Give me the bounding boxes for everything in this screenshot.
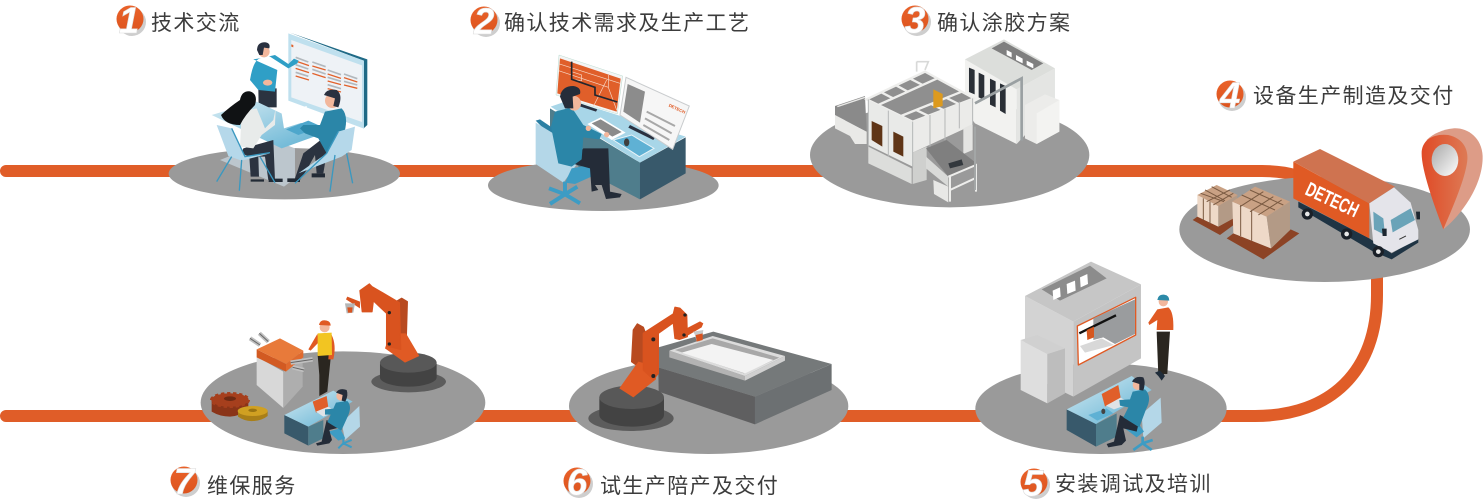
step 5 scene: installation and training: [975, 262, 1227, 454]
platform 1: [169, 148, 400, 199]
badge 2: [470, 1, 500, 42]
heading 1: 技术交流: [151, 12, 241, 35]
truck logo: DETECH: [1302, 179, 1362, 222]
step 4 scene: manufacture and delivery: [1179, 128, 1483, 282]
laptop: [1102, 385, 1131, 409]
side cabinet: [1021, 335, 1065, 403]
heading 3: 确认涂胶方案: [937, 12, 1071, 35]
operator chair: [1123, 398, 1162, 450]
badge 1: 1: [119, 0, 139, 41]
desk: [284, 391, 353, 446]
outfeed conveyor and stand: [926, 127, 977, 202]
delivery truck: [1293, 149, 1420, 259]
wheels: [1302, 208, 1384, 257]
laptop: [313, 396, 336, 417]
badge 6: [564, 462, 593, 503]
left conveyor: [835, 96, 867, 144]
robot base: [371, 353, 446, 392]
step 6 scene: trial production: [569, 307, 848, 454]
coating tray: [669, 336, 785, 381]
step 1 scene: technical exchange: [169, 33, 400, 199]
badge 5: [1020, 463, 1050, 504]
meeting table: [212, 102, 323, 187]
desk: [550, 100, 686, 199]
platform 3: [810, 103, 1089, 207]
heading 6: 试生产陪产及交付: [600, 475, 779, 498]
process line: upper route: [6, 171, 1330, 190]
robot base: [588, 386, 674, 431]
monitor wall: [288, 33, 367, 129]
robot arm: [619, 307, 703, 397]
pallet of boxes: large: [1227, 187, 1299, 259]
platform 4: [1179, 177, 1470, 282]
work platform: [658, 332, 832, 424]
monitor: orange schematic: [556, 55, 623, 114]
badge 4: [1216, 75, 1246, 116]
step 3 scene: coating plan: [810, 39, 1089, 207]
spray booth: [965, 39, 1055, 144]
side cabinet: [1025, 94, 1059, 144]
step 7 scene: maintenance: [201, 284, 485, 454]
gluing machine: [250, 333, 313, 408]
platform 2: [488, 160, 719, 211]
platform 5: [975, 363, 1227, 454]
heading 2: 确认技术需求及生产工艺: [504, 12, 750, 35]
location pin: [1422, 128, 1483, 229]
badge 5: 5: [1023, 463, 1045, 504]
badge 3: [902, 0, 931, 41]
keys: [592, 119, 622, 137]
man seated: [287, 90, 346, 182]
gears: [211, 393, 268, 421]
robot arm: [345, 284, 419, 363]
main coater: [867, 62, 974, 184]
step 2 scene: confirm requirements: [488, 55, 719, 211]
keyboard: [587, 117, 626, 140]
badge 1: [116, 0, 146, 41]
worker in safety vest: [308, 320, 335, 396]
monitor: document: [620, 77, 689, 149]
technician chair: [328, 406, 360, 448]
pallet of boxes: small: [1193, 185, 1238, 235]
desk: [1067, 376, 1152, 447]
platform 7: [201, 351, 485, 454]
gantry pipe: [975, 78, 1022, 141]
woman seated: [221, 91, 283, 182]
standing presenter: [250, 42, 299, 107]
heading 7: 维保服务: [207, 475, 297, 498]
operator: [1107, 377, 1149, 447]
supervising engineer: [1148, 295, 1173, 381]
badge 6: 6: [567, 462, 588, 503]
heading 5: 安装调试及培训: [1055, 473, 1212, 496]
chairs: [217, 125, 355, 192]
technician: [316, 389, 350, 446]
chair: [536, 119, 598, 204]
screen logo: DETECH: [668, 103, 686, 115]
platform 6: [569, 358, 848, 454]
badge 4: 4: [1219, 75, 1240, 116]
badge 2: 2: [473, 1, 495, 42]
badge 7: [170, 461, 200, 502]
badge 3: 3: [905, 0, 926, 41]
heading 4: 设备生产制造及交付: [1253, 85, 1455, 108]
badge 7: 7: [174, 461, 197, 502]
coating machine: [1025, 262, 1141, 397]
operator: [551, 86, 622, 199]
process line: lower route with curve: [6, 262, 1377, 416]
